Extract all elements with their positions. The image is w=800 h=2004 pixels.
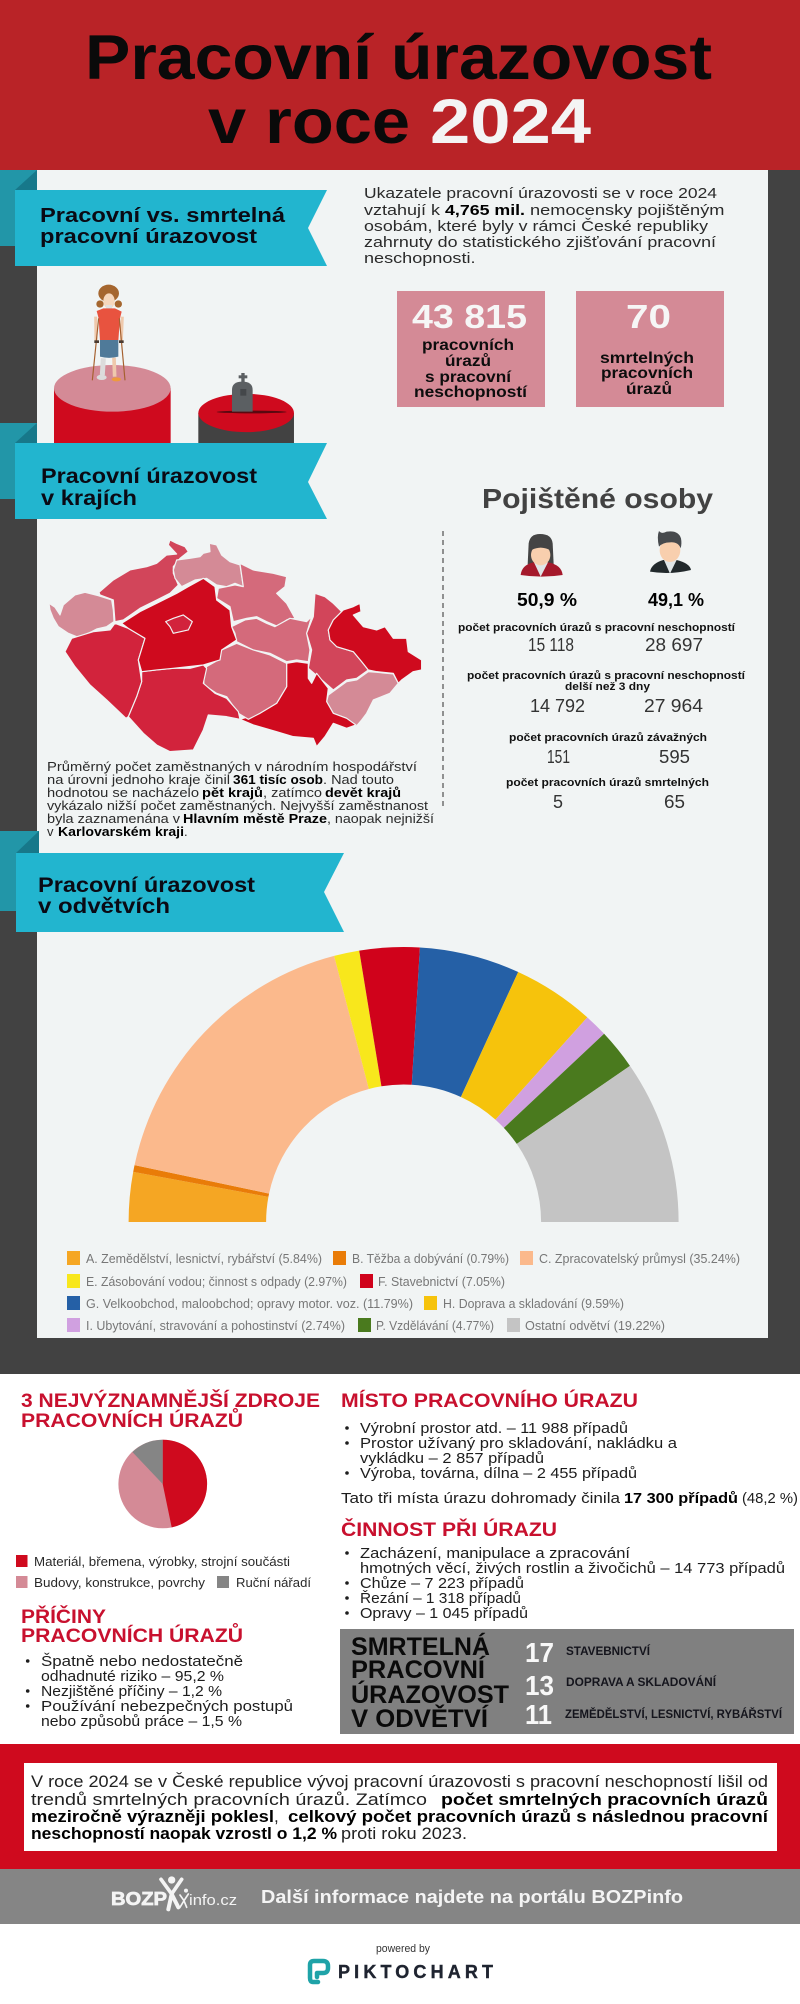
section heading ribbon: Pracovní úrazovost v krajích bbox=[0, 423, 327, 519]
regional text: , zatímco bbox=[263, 785, 322, 800]
chart legend: H. Doprava a skladování (9.59%) bbox=[443, 1296, 624, 1311]
title: Pracovní úrazovost bbox=[85, 23, 712, 93]
conclusion band: meziročně výrazněji poklesl bbox=[31, 1807, 274, 1826]
panel: activity at injury: Zacházení, manipulace a zpracování bbox=[360, 1545, 631, 1562]
icon: Piktochart logo bbox=[310, 1961, 328, 1982]
intro text bbox=[364, 186, 724, 267]
chart legend: C. Zpracovatelský průmysl (35.24%) bbox=[539, 1251, 740, 1266]
panel: causes of injury: odhadnuté riziko – 95,2 % bbox=[41, 1668, 224, 1685]
panel: activity at injury: Chůze – 7 223 případů bbox=[360, 1575, 524, 1592]
conclusion band: počet smrtelných pracovních úrazů bbox=[441, 1790, 768, 1809]
footer: powered by Piktochart bbox=[310, 1943, 493, 1982]
link text: Další informace najdete na portálu BOZPinfo bbox=[261, 1887, 683, 1907]
section heading ribbon: Pracovní vs. smrtelná pracovní úrazovost bbox=[0, 170, 327, 266]
conclusion band: V roce 2024 se v České republice vývoj pracovní úrazovosti s pracovní neschopností lišil od bbox=[31, 1772, 768, 1791]
intro text: Ukazatele pracovní úrazovosti se v roce 2024 bbox=[364, 186, 717, 202]
panel: place of injury: Výroba, továrna, dílna – 2 455 případů bbox=[360, 1465, 637, 1482]
stat card: 70: 70 bbox=[626, 298, 671, 335]
logo: BOZPinfo: info.cz bbox=[189, 1892, 237, 1909]
panel: causes of injury: nebo způsobů práce – 1,5 % bbox=[41, 1713, 242, 1730]
chart legend: Ostatní odvětví (19.22%) bbox=[525, 1318, 665, 1333]
chart legend: F. Stavebnictví (7.05%) bbox=[378, 1274, 505, 1289]
chart legend: I. Ubytování, stravování a pohostinství (2.74%) bbox=[86, 1318, 345, 1333]
panel: place of injury: Tato tři místa úrazu dohromady činila bbox=[341, 1490, 621, 1507]
heading bbox=[21, 1388, 320, 1432]
intro text: vztahují k bbox=[364, 203, 441, 219]
panel: fatal injuries by sector: 11 bbox=[525, 1699, 552, 1730]
icon: right cylinder bbox=[198, 394, 294, 443]
panel: activity at injury bbox=[341, 1517, 785, 1622]
footer: powered by Piktochart: powered by bbox=[376, 1943, 430, 1955]
regional text: na úrovni jednoho kraje činil bbox=[47, 772, 230, 787]
chart: semicircle donut by sector bbox=[129, 947, 679, 1222]
pie legend bbox=[16, 1554, 311, 1590]
stats: 50,9 % bbox=[517, 590, 577, 610]
chart legend: P. Vzdělávání (4.77%) bbox=[376, 1318, 494, 1333]
chart legend bbox=[67, 1251, 740, 1333]
stats: delší než 3 dny bbox=[565, 681, 651, 693]
conclusion band: neschopností naopak vzrostl o 1,2 % bbox=[31, 1824, 337, 1843]
panel: causes of injury: Používání nebezpečných postupů bbox=[41, 1698, 293, 1715]
regional text: pět krajů bbox=[202, 785, 263, 800]
stats bbox=[458, 590, 746, 812]
panel: top 3 sources of injury bbox=[16, 1388, 320, 1590]
intro text: neschopnosti. bbox=[364, 251, 476, 267]
stat card: 70: pracovních bbox=[601, 365, 693, 382]
conclusion band: , bbox=[274, 1807, 279, 1826]
section heading ribbon: Pracovní úrazovost v odvětvích: v odvětvích bbox=[38, 894, 170, 918]
panel: place of injury: (48,2 %) bbox=[742, 1490, 798, 1507]
stats: 5 bbox=[553, 792, 563, 812]
heading: Pojištěné osoby bbox=[482, 483, 714, 514]
stat card: 43 815: úrazů bbox=[445, 353, 491, 370]
stat card: 70: smrtelných bbox=[600, 350, 694, 367]
panel: causes of injury: PRACOVNÍCH ÚRAZŮ bbox=[21, 1621, 243, 1647]
panel: fatal injuries by sector bbox=[340, 1629, 794, 1734]
section heading ribbon: Pracovní vs. smrtelná pracovní úrazovost: pracovní úrazovost bbox=[40, 225, 257, 248]
intro text: zahrnuty do statistického zjišťování pracovní bbox=[364, 235, 716, 251]
pie chart bbox=[118, 1440, 207, 1528]
panel: place of injury bbox=[341, 1388, 798, 1507]
regional text: Hlavním městě Praze bbox=[183, 811, 327, 826]
panel: fatal injuries by sector: DOPRAVA A SKLADOVÁNÍ bbox=[566, 1674, 717, 1689]
pie legend: Budovy, konstrukce, povrchy bbox=[34, 1575, 206, 1590]
regional text: Karlovarském kraji bbox=[58, 824, 184, 839]
icon: injured girl on crutches bbox=[92, 285, 125, 381]
regional text: . bbox=[184, 824, 188, 839]
stats: 28 697 bbox=[645, 635, 703, 655]
chart legend: A. Zemědělství, lesnictví, rybářství (5.84%) bbox=[86, 1251, 322, 1266]
panel: activity at injury: hmotných věcí, živých rostlin a živočichů – 14 773 případů bbox=[360, 1560, 785, 1577]
stat card: 70 bbox=[576, 291, 724, 407]
section heading ribbon: Pracovní úrazovost v odvětvích: Pracovní úrazovost bbox=[38, 873, 255, 897]
panel: fatal injuries by sector: ÚRAZOVOST bbox=[351, 1679, 509, 1709]
section heading ribbon: Pracovní úrazovost v krajích: v krajích bbox=[41, 486, 137, 510]
conclusion band: proti roku 2023. bbox=[341, 1824, 467, 1843]
intro text: osobám, které byly v rámci České republiky bbox=[364, 218, 709, 235]
stats: 65 bbox=[664, 792, 685, 812]
heading: 3 NEJVÝZNAMNĚJŠÍ ZDROJE bbox=[21, 1388, 320, 1412]
stats: 49,1 % bbox=[648, 590, 704, 610]
stats: počet pracovních úrazů smrtelných bbox=[506, 777, 709, 789]
regional text: vykázalo nižší počet zaměstnaných. Nejvyšší zaměstnanost bbox=[47, 798, 428, 813]
stat card: 70: úrazů bbox=[626, 381, 672, 398]
section heading ribbon: Pracovní úrazovost v krajích: Pracovní úrazovost bbox=[41, 464, 257, 488]
heading: PRACOVNÍCH ÚRAZŮ bbox=[21, 1406, 243, 1432]
title: v roce bbox=[208, 87, 410, 157]
panel: fatal injuries by sector: PRACOVNÍ bbox=[351, 1655, 486, 1684]
stat card: 43 815: neschopností bbox=[414, 384, 528, 401]
title: 2024 bbox=[430, 87, 591, 157]
header band bbox=[0, 0, 800, 170]
stat card: 43 815 bbox=[397, 291, 545, 407]
pie legend: Ruční nářadí bbox=[236, 1575, 311, 1590]
conclusion band bbox=[0, 1744, 800, 1869]
stats: počet pracovních úrazů závažných bbox=[509, 732, 707, 744]
icons: woman and man bbox=[521, 531, 691, 577]
title bbox=[85, 23, 712, 157]
stats: 595 bbox=[659, 747, 690, 767]
regional text: v bbox=[47, 824, 54, 839]
panel: place of injury: Prostor užívaný pro skladování, nakládku a bbox=[360, 1435, 678, 1452]
panel: fatal injuries by sector: ZEMĚDĚLSTVÍ, LESNICTVÍ, RYBÁŘSTVÍ bbox=[565, 1706, 783, 1721]
panel: causes of injury: PŘÍČINY bbox=[21, 1604, 106, 1628]
panel: place of injury: 17 300 případů bbox=[624, 1490, 738, 1507]
stats: 27 964 bbox=[644, 696, 703, 716]
intro text: nemocensky pojištěným bbox=[530, 203, 724, 219]
panel: place of injury: vykládku – 2 857 případů bbox=[360, 1450, 544, 1467]
regional text: byla zaznamenána v bbox=[47, 811, 181, 826]
regional text: devět krajů bbox=[325, 785, 401, 800]
stat card: 43 815: 43 815 bbox=[412, 298, 527, 335]
panel: fatal injuries by sector: 17 bbox=[525, 1637, 554, 1668]
stat card: 43 815: s pracovní bbox=[425, 369, 512, 386]
icon: left cylinder bbox=[54, 365, 171, 443]
section heading ribbon: Pracovní úrazovost v odvětvích bbox=[0, 831, 344, 932]
panel: fatal injuries by sector: 13 bbox=[525, 1670, 554, 1701]
panel: fatal injuries by sector: SMRTELNÁ bbox=[351, 1632, 490, 1661]
conclusion band: celkový počet pracovních úrazů s následnou pracovní bbox=[288, 1807, 769, 1826]
panel: causes of injury: Špatně nebo nedostatečně bbox=[41, 1653, 243, 1670]
panel: fatal injuries by sector: V ODVĚTVÍ bbox=[351, 1703, 489, 1733]
panel: causes of injury: Nezjištěné příčiny – 1,2 % bbox=[41, 1683, 222, 1700]
conclusion band: trendů smrtelných pracovních úrazů. Zatímco bbox=[31, 1790, 427, 1809]
logo: BOZPinfo: BOZP bbox=[111, 1889, 167, 1909]
stat card: 43 815: pracovních bbox=[422, 337, 514, 354]
regional text bbox=[47, 759, 434, 839]
stats: 14 792 bbox=[530, 696, 585, 716]
panel: activity at injury: Řezání – 1 318 případů bbox=[360, 1590, 521, 1607]
icon: tombstone bbox=[217, 373, 287, 413]
stats: počet pracovních úrazů s pracovní neschopností bbox=[467, 670, 746, 682]
BOZPinfo band bbox=[0, 1869, 800, 1924]
footer: powered by Piktochart: PIKTOCHART bbox=[338, 1962, 493, 1982]
pie legend: Materiál, břemena, výrobky, strojní součásti bbox=[34, 1554, 290, 1569]
panel: place of injury: Výrobní prostor atd. – 11 988 případů bbox=[360, 1420, 628, 1437]
main light panel bbox=[37, 170, 768, 1338]
panel: activity at injury: Opravy – 1 045 případů bbox=[360, 1605, 528, 1622]
intro text: 4,765 mil. bbox=[445, 203, 525, 219]
panel: place of injury: MÍSTO PRACOVNÍHO ÚRAZU bbox=[341, 1388, 638, 1412]
logo: BOZPinfo bbox=[111, 1876, 237, 1909]
panel: insured persons bbox=[458, 483, 746, 812]
stats: 151 bbox=[547, 747, 570, 767]
regional text: , naopak nejnižší bbox=[327, 811, 434, 826]
panel: fatal injuries by sector: STAVEBNICTVÍ bbox=[566, 1643, 651, 1658]
chart legend: B. Těžba a dobývání (0.79%) bbox=[352, 1251, 509, 1266]
regional text: Průměrný počet zaměstnaných v národním hospodářství bbox=[47, 759, 417, 774]
regional text: . Nad touto bbox=[323, 772, 394, 787]
regional text: hodnotou se nacházelo bbox=[47, 785, 199, 800]
panel: activity at injury: ČINNOST PŘI ÚRAZU bbox=[341, 1517, 557, 1541]
regional text: 361 tisíc osob bbox=[233, 772, 323, 787]
panel: causes of injury bbox=[21, 1604, 293, 1730]
chart legend: E. Zásobování vodou; činnost s odpady (2.97%) bbox=[86, 1274, 347, 1289]
podium illustration bbox=[54, 285, 294, 443]
map of Czech regions bbox=[49, 540, 422, 752]
stats: počet pracovních úrazů s pracovní neschopností bbox=[458, 622, 736, 634]
chart legend: G. Velkoobchod, maloobchod; opravy motor. voz. (11.79%) bbox=[86, 1296, 413, 1311]
section heading ribbon: Pracovní vs. smrtelná pracovní úrazovost: Pracovní vs. smrtelná bbox=[40, 204, 286, 227]
stats: 15 118 bbox=[528, 635, 574, 655]
